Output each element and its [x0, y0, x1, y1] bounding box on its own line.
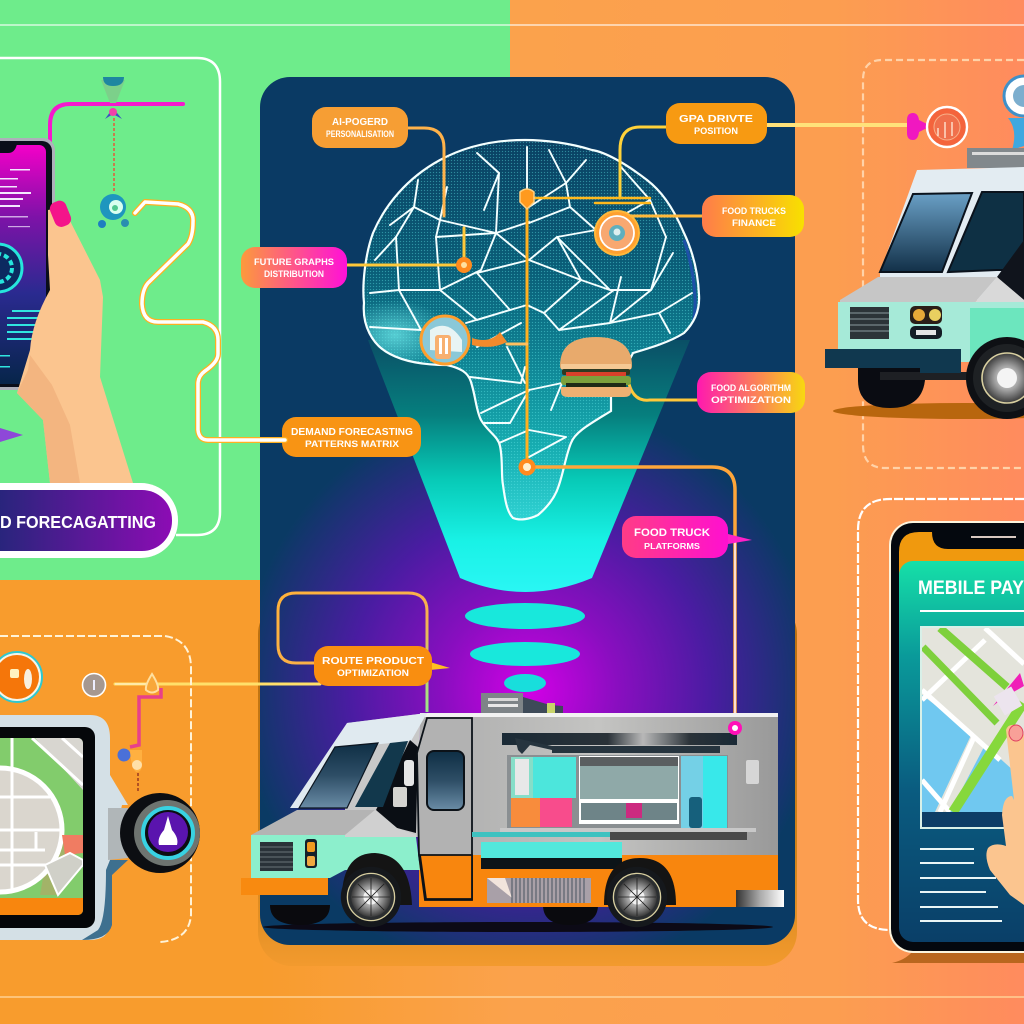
grille — [260, 842, 293, 871]
door window — [427, 751, 464, 810]
hood — [251, 810, 375, 835]
bell icon — [159, 816, 177, 845]
background: orange lower-left section — [0, 580, 262, 1024]
cab — [345, 713, 427, 837]
label: future graphs: FUTURE GRAPHS — [254, 257, 334, 267]
icon: pin connector — [907, 113, 927, 140]
route map — [920, 626, 1024, 829]
wheels — [341, 867, 667, 927]
cab door — [417, 718, 472, 900]
icon: location badge — [595, 211, 639, 255]
label: route product optimization: OPTIMIZATION — [337, 668, 409, 678]
truck front wheel — [966, 337, 1024, 419]
device map — [0, 738, 83, 915]
hand pointing — [986, 725, 1024, 905]
truck hood — [840, 277, 997, 308]
label: food algorithm: FOOD ALGORITHM — [711, 383, 791, 393]
icon: location sensor — [98, 194, 129, 228]
panel shadow — [258, 600, 797, 966]
label: GPS route — [666, 103, 767, 144]
truck headlights — [910, 306, 942, 339]
label: AI powered: PERSONALISATION — [326, 129, 394, 139]
panel: GPS route device — [0, 636, 200, 942]
truck grille — [850, 307, 889, 339]
side window — [376, 740, 418, 833]
dashed frame — [863, 60, 1024, 468]
icon: orange badge — [927, 107, 967, 147]
label: food trucks right — [702, 195, 804, 237]
panel: right top truck — [825, 60, 1024, 468]
dashed frame — [0, 636, 191, 942]
counter — [472, 828, 756, 840]
label: food algorithm: OPTIMIZATION — [711, 395, 791, 405]
truck bumper — [825, 349, 961, 373]
teal board — [481, 842, 622, 869]
label: food truck platforms — [622, 516, 752, 558]
ground shadow — [263, 922, 773, 932]
icon: burger — [560, 337, 632, 397]
pill heading: demand forecasting — [0, 483, 178, 558]
phone screen top — [899, 532, 1024, 580]
gold frame connector — [278, 593, 427, 712]
hologram discs — [465, 603, 585, 692]
truck cab — [880, 167, 1024, 300]
icon: beacon — [101, 77, 125, 193]
label: demand forecasting: PATTERNS MATRIX — [305, 439, 399, 449]
mirror — [393, 760, 414, 807]
phone shadow — [892, 952, 1024, 963]
device body — [0, 715, 128, 940]
fingernail — [48, 199, 73, 229]
front mint section — [251, 835, 420, 878]
icon: orange data badge — [0, 652, 42, 702]
rear wheel — [858, 360, 925, 408]
rear step — [736, 890, 784, 907]
label: food truck platforms: PLATFORMS — [644, 542, 701, 551]
label: future graphs — [241, 247, 347, 288]
windshield — [299, 743, 378, 808]
label: food trucks right: FOOD TRUCKS — [722, 206, 786, 216]
awning — [502, 733, 737, 754]
right display — [681, 756, 727, 829]
icon: pin dot — [118, 748, 142, 772]
label: food trucks right: FINANCE — [732, 218, 776, 228]
panel: central AI brain — [115, 77, 907, 945]
centre window — [579, 756, 679, 824]
label: AI powered: AI-POGERD — [332, 117, 388, 128]
roof unit — [481, 693, 563, 713]
label: food truck platforms: FOOD TRUCK — [634, 527, 710, 539]
pink service marker — [728, 721, 742, 735]
icon: data badge with arrow — [421, 316, 507, 364]
label: future graphs: DISTRIBUTION — [264, 269, 324, 279]
side vent — [487, 878, 591, 903]
magenta connector — [50, 104, 183, 150]
connector with marker — [115, 674, 161, 792]
hand holding phone — [17, 199, 133, 483]
orange lower body — [419, 855, 778, 907]
rear hidden wheels — [270, 905, 598, 925]
text lines — [920, 848, 1002, 922]
label: demand forecasting — [282, 417, 421, 457]
wheel arches — [342, 853, 676, 905]
truck box body — [420, 713, 778, 855]
service window — [507, 755, 728, 829]
teal screen panel — [899, 561, 1024, 942]
hologram cone — [368, 340, 690, 592]
phone body — [889, 521, 1024, 953]
bumper — [241, 878, 328, 895]
node: brain top — [520, 189, 534, 209]
icon: grey location badge — [82, 674, 106, 696]
nail — [1009, 725, 1023, 741]
route path — [135, 202, 285, 440]
panel: mobile payment phone — [858, 499, 1024, 963]
label: route product optimization: ROUTE PRODUCT — [322, 656, 424, 667]
connector lines — [115, 125, 907, 722]
dashed frame — [0, 58, 220, 535]
chassis — [880, 372, 975, 380]
node: brain base — [518, 458, 536, 476]
food truck: main illustration — [241, 693, 784, 932]
pill heading: demand forecasting: D FORECAGATTING — [0, 512, 156, 532]
label: route product optimization — [314, 646, 450, 686]
cab side glass — [355, 741, 408, 807]
panel: demand forecasting — [0, 58, 285, 558]
truck mint front — [838, 302, 1024, 362]
small pointer — [0, 428, 23, 442]
notch — [932, 532, 1024, 549]
label: food algorithm — [697, 372, 805, 413]
label: GPS route: GPA DRIVTE — [679, 114, 753, 125]
left colour shelf — [511, 757, 576, 827]
truck ground shadow — [833, 403, 1024, 419]
headlights — [305, 839, 317, 868]
device knob — [108, 793, 200, 873]
icon: gps badge — [1004, 76, 1024, 150]
phone — [0, 138, 55, 390]
label: AI powered — [312, 107, 408, 148]
background: green section — [0, 0, 510, 580]
node: left branch — [456, 257, 472, 273]
label: GPS route: POSITION — [694, 126, 738, 136]
dashed frame — [858, 499, 1024, 930]
truck roof unit — [967, 148, 1024, 168]
label: demand forecasting: DEMAND FORECASTING — [291, 427, 413, 438]
brain network illustration — [340, 135, 705, 525]
wall dispenser — [746, 760, 759, 784]
